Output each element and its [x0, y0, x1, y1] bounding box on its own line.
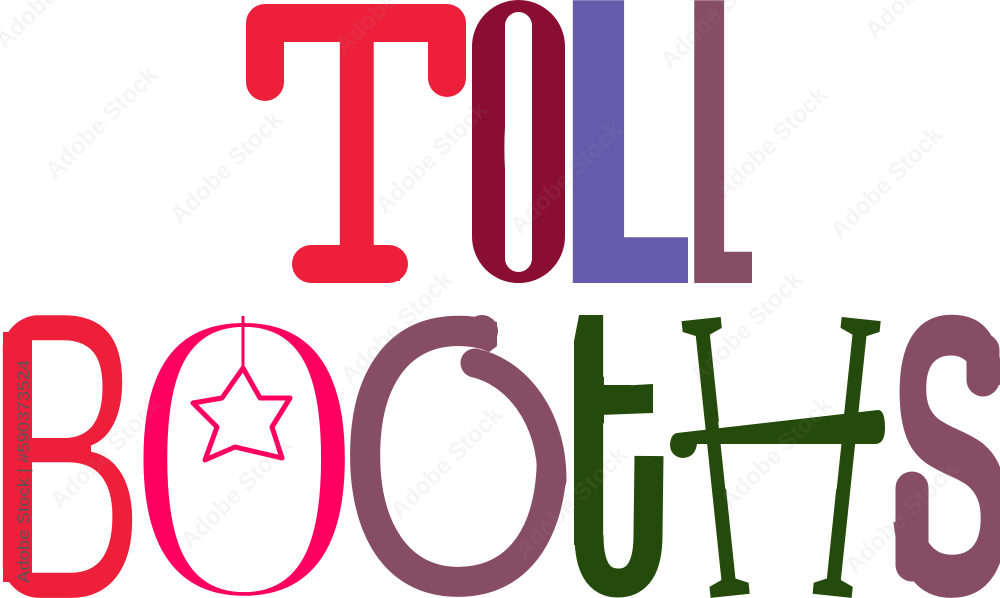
watermark pattern: Adobe Stock [825, 121, 948, 244]
watermark pattern: Adobe Stock [45, 391, 168, 514]
watermark pattern: Adobe Stock [370, 96, 493, 219]
letter H [670, 317, 885, 598]
watermark pattern: Adobe Stock [710, 81, 833, 204]
title line: BOOTHS [2, 314, 1000, 598]
watermark pattern: Adobe Stock [335, 266, 458, 389]
watermark pattern: Adobe Stock [385, 401, 508, 524]
watermark pattern: Adobe Stock [505, 116, 628, 239]
watermark pattern: Adobe Stock [175, 431, 298, 554]
watermark pattern: Adobe Stock [510, 441, 633, 564]
watermark pattern: Adobe Stock [165, 106, 288, 229]
watermark pattern: Adobe Stock [685, 266, 808, 389]
title line: TOLL [246, 0, 752, 283]
letter O [472, 0, 565, 283]
watermark pattern: Adobe Stock [40, 61, 163, 184]
stock image id label: Adobe Stock | #590373524 [14, 360, 33, 583]
watermark pattern: Adobe Stock [840, 456, 963, 579]
letter t [574, 315, 664, 598]
watermark pattern: Adobe Stock [715, 391, 838, 514]
letter B [2, 315, 132, 598]
icon: hanging star [193, 316, 290, 460]
